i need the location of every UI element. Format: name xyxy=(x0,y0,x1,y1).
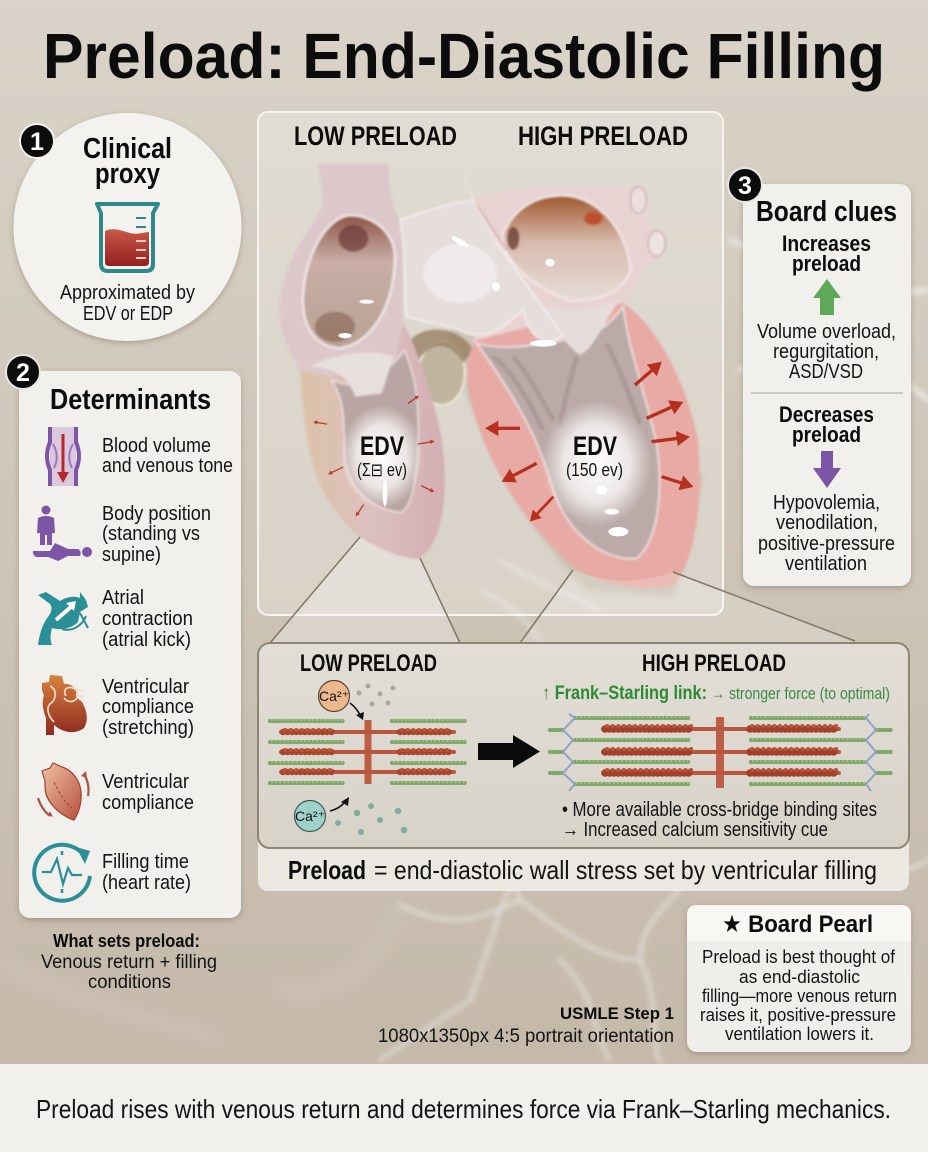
icon: green up arrow xyxy=(813,279,841,315)
badge 3: 3 xyxy=(738,172,752,200)
subheading: increases preload: Increases xyxy=(782,231,871,256)
illustration: heart cross-sections xyxy=(279,163,703,597)
text: what sets preload: What sets preload: xyxy=(53,931,200,951)
arrows: low preload wall stress xyxy=(316,397,432,514)
text: ventricular compliance: compliance xyxy=(102,792,194,814)
icon: vein xyxy=(47,427,79,486)
diagram: low preload sarcomere xyxy=(270,720,466,784)
text: cross-bridge notes: → Increased calcium sensitivity cue xyxy=(562,819,828,841)
subheading: decreases preload: preload xyxy=(792,422,861,447)
text: frank-starling link: ↑ Frank–Starling link: xyxy=(542,683,707,704)
icon: calcium abundant: Ca²⁺ xyxy=(295,808,325,824)
icon: atrial contraction xyxy=(38,592,88,645)
text: frank-starling link: → stronger force (to optimal) xyxy=(711,684,890,703)
text: what sets preload: conditions xyxy=(88,972,171,993)
text: increases list: regurgitation, xyxy=(773,341,879,363)
icon: beaker xyxy=(97,204,158,271)
label: high EDV xyxy=(566,431,623,480)
text: what sets preload xyxy=(41,931,217,993)
panel: determinants xyxy=(6,355,241,918)
panel: board pearl xyxy=(687,905,911,1052)
label: high EDV: (150 ev) xyxy=(566,460,623,480)
icon: calcium sparse: Ca²⁺ xyxy=(319,688,349,704)
subheading: increases preload: preload xyxy=(792,251,861,276)
text: decreases list xyxy=(758,492,895,575)
vessel stumps xyxy=(630,187,646,213)
heading: clinical proxy: proxy xyxy=(95,158,160,190)
label: low EDV: (Σ⊟ ev) xyxy=(357,460,407,480)
text: decreases list: venodilation, xyxy=(776,512,878,534)
text: filling time: Filling time xyxy=(102,851,189,873)
zoom connector lines xyxy=(270,537,855,643)
title: Preload: End-Diastolic Filling xyxy=(43,20,885,92)
arrows: high preload wall stress xyxy=(497,369,682,515)
text: ventricular compliance stretching: compliance xyxy=(102,696,194,718)
text: ventricular compliance stretching: (stretching) xyxy=(102,717,194,739)
panel: clinical proxy xyxy=(14,113,242,341)
text: pearl body: filling—more venous return xyxy=(702,986,897,1006)
left heart xyxy=(279,163,445,560)
text: pearl body: Preload is best thought of xyxy=(702,947,896,967)
text: ventricular compliance stretching: Ventricular xyxy=(102,676,189,698)
icon: clock with heart rate xyxy=(34,845,90,901)
text: approximated by: Approximated by xyxy=(60,282,195,304)
text: increases list: ASD/VSD xyxy=(789,361,863,383)
text: blood volume: and venous tone xyxy=(102,455,233,477)
heading: high preload: HIGH PRELOAD xyxy=(518,121,688,151)
text: body position: supine) xyxy=(102,544,161,566)
gap between hearts xyxy=(418,342,465,405)
diagram: high preload sarcomere xyxy=(550,714,891,791)
text: cross-bridge notes xyxy=(562,799,877,841)
label: high EDV: EDV xyxy=(573,431,617,461)
text: blood volume: Blood volume xyxy=(102,435,211,457)
cavity glows xyxy=(340,405,423,508)
text: ventricular compliance: Ventricular xyxy=(102,771,189,793)
heading: clinical proxy: Clinical xyxy=(83,133,172,165)
icon: calcium sparse xyxy=(318,680,396,720)
text: preload definition: = end-diastolic wall stress set by ventricular filling xyxy=(374,855,877,885)
badge 2 xyxy=(6,355,40,389)
panel: board clues xyxy=(728,168,911,586)
text: what sets preload: Venous return + filling xyxy=(41,952,217,973)
badge 2: 2 xyxy=(16,359,30,387)
heading: high preload: HIGH PRELOAD xyxy=(642,650,786,677)
icon: body position xyxy=(33,506,92,561)
text: frank-starling link xyxy=(542,683,890,704)
text: approximated by xyxy=(60,282,195,325)
summary strip xyxy=(258,820,909,891)
heading: low preload: LOW PRELOAD xyxy=(300,650,437,677)
heading: clinical proxy xyxy=(83,133,172,190)
footer banner xyxy=(0,1064,928,1152)
text: decreases list: Hypovolemia, xyxy=(773,492,880,514)
text: increases list xyxy=(757,321,896,383)
text: pearl body xyxy=(700,947,897,1044)
text: atrial contraction: (atrial kick) xyxy=(102,629,191,651)
specular highlights xyxy=(338,235,628,536)
badge 3 xyxy=(728,168,762,202)
icon: heart stretching xyxy=(42,675,87,735)
badge 1 xyxy=(20,124,54,158)
arrow: low to high xyxy=(478,735,540,768)
text: filling time: (heart rate) xyxy=(102,872,191,894)
label: low EDV: EDV xyxy=(360,431,404,461)
text: body position: Body position xyxy=(102,503,211,525)
text: pearl body: as end-diastolic xyxy=(739,967,860,987)
label: low EDV xyxy=(357,431,407,480)
text: atrial contraction: contraction xyxy=(102,608,193,630)
text: ventricular compliance stretching xyxy=(102,676,194,739)
text: ventricular compliance xyxy=(102,771,194,814)
central great vessels xyxy=(400,200,563,341)
text: preload definition: Preload xyxy=(288,855,366,885)
icon: calcium abundant xyxy=(294,797,407,835)
badge 1: 1 xyxy=(30,128,44,156)
heading: low preload: LOW PRELOAD xyxy=(294,121,457,151)
text: body position: (standing vs xyxy=(102,523,200,545)
heading: board clues: Board clues xyxy=(756,196,897,228)
shadow xyxy=(447,297,703,597)
text: pearl body: ventilation lowers it. xyxy=(725,1024,874,1044)
text: USMLE step 1: USMLE Step 1 xyxy=(560,1004,674,1023)
icon: heart compliance xyxy=(38,763,88,820)
text: filling time xyxy=(102,851,191,894)
heading: determinants: Determinants xyxy=(50,384,211,416)
text: atrial contraction xyxy=(102,587,193,651)
heading: board pearl: ★ Board Pearl xyxy=(722,911,873,938)
text: blood volume xyxy=(102,435,233,477)
text: approximated by: EDV or EDP xyxy=(83,303,173,325)
subheading: decreases preload: Decreases xyxy=(779,402,874,427)
text: decreases list: ventilation xyxy=(785,553,867,575)
icon: purple down arrow xyxy=(813,451,841,488)
text: atrial contraction: Atrial xyxy=(102,587,144,609)
text: body position xyxy=(102,503,211,566)
right heart xyxy=(473,187,665,343)
text: cross-bridge notes: • More available cross-bridge binding sites xyxy=(562,799,877,821)
text: increases list: Volume overload, xyxy=(757,321,896,343)
text: USMLE step 1: 1080x1350px 4:5 portrait orientation xyxy=(378,1026,674,1047)
subheading: decreases preload xyxy=(779,402,874,447)
text: decreases list: positive-pressure xyxy=(758,533,895,555)
panel: low vs high preload hearts xyxy=(258,112,723,615)
panel: sarcomere comparison xyxy=(258,643,909,848)
subheading: increases preload xyxy=(782,231,871,276)
text: USMLE step 1 xyxy=(378,1004,674,1047)
text: pearl body: raises it, positive-pressure xyxy=(700,1005,896,1025)
